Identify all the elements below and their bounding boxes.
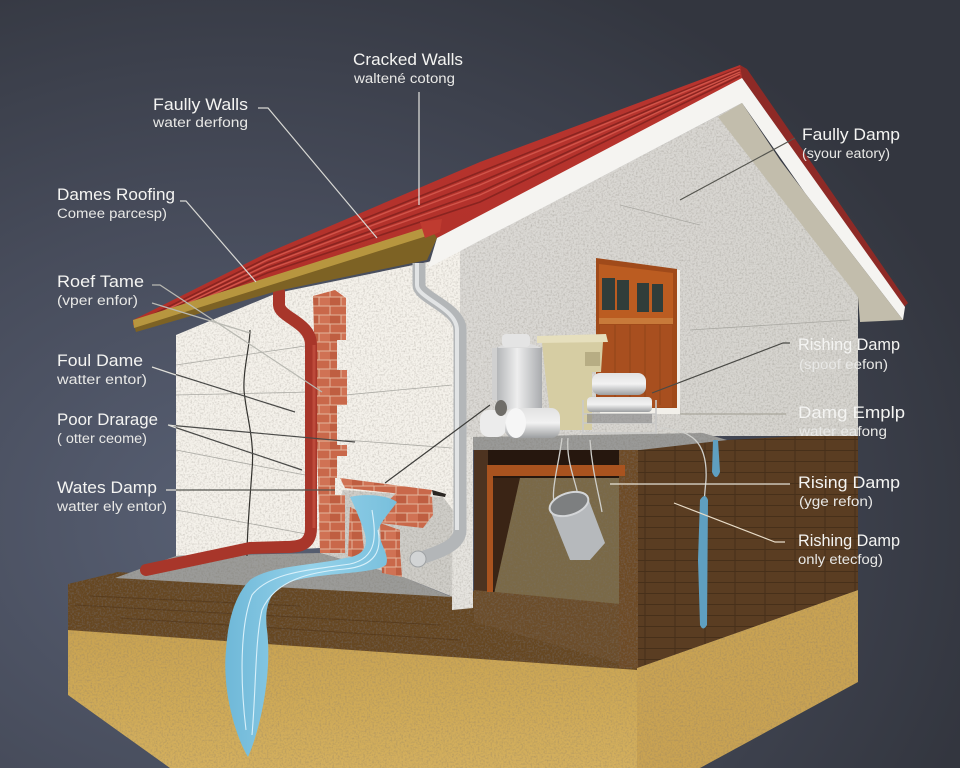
label: rising damp: Rising Damp — [798, 473, 900, 492]
leader lines — [152, 92, 795, 542]
label: damg emplp: water eafong — [798, 424, 887, 439]
red downpipe — [146, 292, 314, 570]
labels right — [798, 125, 905, 567]
label: foul dame: Foul Dame — [57, 351, 143, 370]
soil band marks — [75, 596, 460, 640]
label: poor drarage: ( otter ceome) — [57, 431, 147, 446]
label: damg emplp: Damg Emplp — [798, 403, 905, 422]
coil rack — [587, 397, 652, 412]
window — [596, 258, 680, 414]
hoses — [553, 428, 706, 515]
label: faulty walls: water derfong — [152, 115, 248, 130]
soffit — [718, 103, 903, 322]
gutter — [133, 219, 442, 332]
label: rising damp: (yge refon) — [799, 494, 873, 509]
right foundation wall — [637, 433, 858, 668]
crack — [244, 330, 253, 556]
damaged brick patch — [340, 478, 446, 577]
grey downpipe — [410, 263, 460, 567]
wall plaster lines — [176, 205, 850, 535]
concrete slab — [473, 433, 727, 450]
labels left — [56, 50, 463, 514]
label: cracked walls: waltené cotong — [353, 71, 455, 86]
label: wates damp — [56, 478, 167, 514]
label: rishing damp upper — [798, 335, 900, 372]
exposed brick column — [313, 290, 347, 553]
water drips — [698, 440, 720, 628]
label: rishing damp lower: Rishing Damp — [798, 531, 900, 550]
label: cracked walls: Cracked Walls — [353, 50, 463, 69]
label: poor drarage — [57, 410, 158, 446]
label: rishing damp upper: Rishing Damp — [798, 335, 900, 354]
concrete apron — [115, 553, 452, 597]
cutaway crawl space — [474, 448, 638, 668]
label: faulty walls — [152, 95, 248, 130]
label: rishing damp lower — [798, 531, 900, 567]
label: roef tame — [57, 272, 144, 308]
label: rishing damp upper: (spoof eefon) — [799, 357, 888, 372]
left wall — [176, 250, 462, 598]
grey stucco patch — [320, 490, 453, 597]
label: dames roofing: Dames Roofing — [57, 185, 175, 204]
roof tiles — [133, 65, 747, 325]
label: roef tame: Roef Tame — [57, 272, 144, 291]
label: dames roofing — [57, 185, 175, 221]
label: rishing damp lower: only etecfog) — [798, 552, 883, 567]
label: roef tame: (vper enfor) — [57, 293, 138, 308]
label: poor drarage: Poor Drarage — [57, 410, 158, 429]
white corner post — [452, 437, 473, 610]
ground: sand layer — [68, 590, 858, 768]
label: wates damp: Wates Damp — [57, 478, 157, 497]
cylinders — [480, 410, 506, 437]
label: faulty damp — [802, 125, 900, 161]
beige unit — [542, 342, 603, 430]
white fascia boards — [428, 78, 905, 322]
label: foul dame — [56, 351, 147, 387]
right gable wall — [460, 103, 858, 437]
equipment — [480, 334, 706, 560]
ground: soil band — [68, 572, 637, 670]
label: foul dame: watter entor) — [56, 372, 147, 387]
bucket — [550, 498, 605, 560]
right roof edge — [740, 65, 908, 307]
label: cracked walls — [353, 50, 463, 86]
white tank — [492, 348, 497, 400]
label: faulty damp: Faully Damp — [802, 125, 900, 144]
water flow — [225, 495, 397, 757]
label: wates damp: watter ely entor) — [56, 499, 167, 514]
label: faulty walls: Faully Walls — [153, 95, 248, 114]
label: damg emplp — [798, 403, 905, 439]
label: faulty damp: (syour eatory) — [802, 146, 890, 161]
label: rising damp — [798, 473, 900, 509]
label: dames roofing: Comee parcesp) — [57, 206, 167, 221]
